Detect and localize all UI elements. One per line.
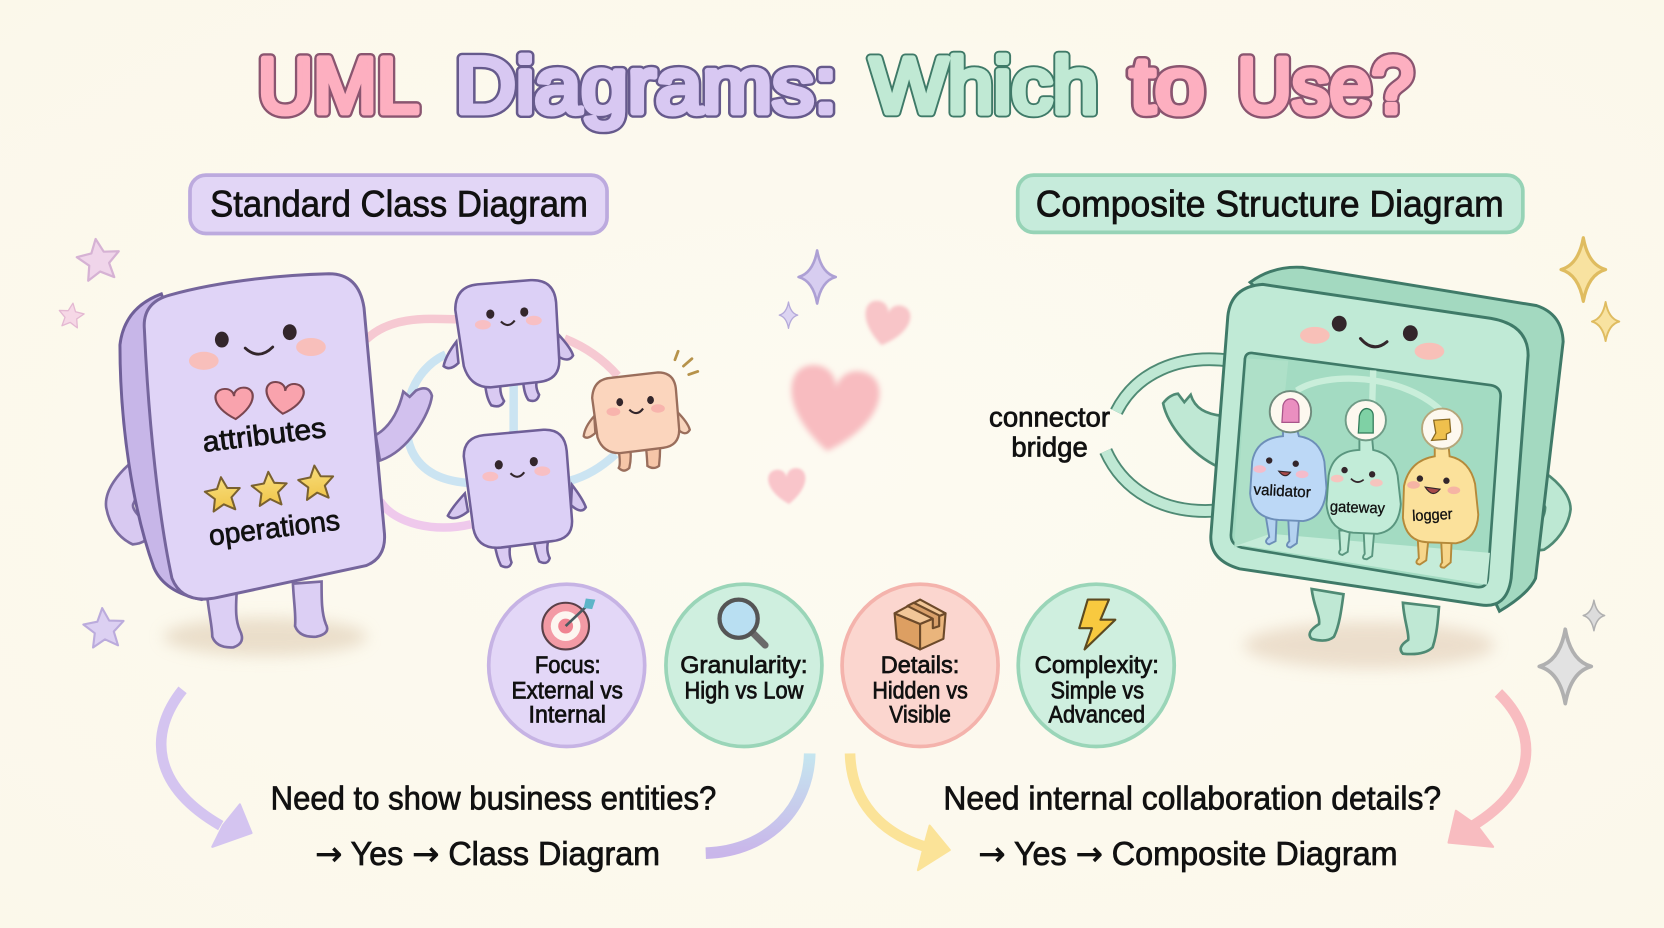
title: Diagrams:: [455, 41, 837, 129]
title: Use?: [1237, 41, 1414, 129]
text: Hidden vs: [872, 677, 968, 704]
text: [512, 652, 623, 729]
text: High vs Low: [684, 677, 804, 704]
stars: [204, 464, 335, 512]
heading: standard class diagram: [190, 175, 607, 233]
decorative sparkles and hearts centre: [767, 250, 913, 506]
arrow: blue to purple curve: [706, 753, 810, 853]
text: [1035, 652, 1159, 729]
label: logger: logger: [1412, 506, 1453, 525]
icon: magnifier: [720, 600, 765, 645]
part: validator: [1250, 391, 1327, 548]
comparison circle: granularity: [666, 584, 822, 747]
left arm: [1163, 394, 1223, 467]
icon: box: [895, 600, 946, 649]
heading: standard class diagram: Standard Class Diagram: [210, 182, 588, 224]
text: Complexity:: [1035, 652, 1159, 679]
hearts: [215, 381, 305, 420]
title: UML: [258, 41, 419, 129]
text: Simple vs: [1051, 677, 1144, 704]
shadow: [1244, 622, 1494, 669]
part: gateway: [1327, 400, 1401, 559]
character: small class top: [444, 280, 573, 406]
text: [680, 652, 808, 704]
character: peach object: [584, 351, 698, 471]
label: connector bridge: connector: [989, 402, 1110, 433]
face: [189, 324, 326, 370]
label: attributes: attributes: [201, 412, 328, 459]
text: [872, 652, 968, 729]
window: [1231, 353, 1501, 587]
decorative stars left: [57, 236, 126, 648]
text: Advanced: [1048, 702, 1145, 729]
comparison circle: complexity: [1018, 584, 1174, 747]
connector rings: left: [366, 319, 618, 527]
spark marks: [675, 351, 698, 375]
shadow: [163, 618, 367, 656]
decision text: class diagram: Need to show business entities?: [271, 780, 716, 817]
decision text: composite diagram: Need internal collaboration details?: [943, 780, 1441, 817]
heading: composite structure diagram: Composite Structure Diagram: [1036, 182, 1504, 224]
title: Use?: [1237, 41, 1414, 129]
box front: [1211, 284, 1528, 605]
title: to: [1130, 41, 1204, 129]
legs: [207, 582, 327, 647]
decision text: class diagram: [271, 780, 716, 873]
label: gateway: gateway: [1330, 498, 1386, 517]
comparison circle: details: [842, 584, 998, 747]
face: [1300, 316, 1444, 360]
decision text: class diagram: → Yes → Class Diagram: [315, 834, 660, 873]
label: connector bridge: [989, 402, 1110, 462]
title: [258, 41, 1414, 129]
arrow: pink: [1449, 693, 1526, 847]
label: operations: operations: [207, 505, 342, 552]
title: UML: [258, 41, 419, 129]
arrow: yellow: [850, 753, 950, 870]
right arm: [1526, 468, 1571, 550]
arrow: purple: [161, 690, 252, 847]
label: connector bridge: bridge: [1011, 431, 1088, 462]
label: validator: validator: [1253, 482, 1311, 502]
window floor: [1234, 534, 1490, 585]
body side: [120, 294, 228, 600]
title: to: [1130, 41, 1204, 129]
part: logger: [1403, 409, 1478, 568]
decision text: composite diagram: → Yes → Composite Diagram: [978, 834, 1398, 873]
connector bridge arcs: [1106, 359, 1231, 511]
character: standard class: [106, 274, 432, 656]
inner connector: [1297, 370, 1440, 410]
text: Granularity:: [680, 652, 808, 679]
text: Details:: [881, 652, 959, 679]
title: Diagrams:: [455, 41, 837, 129]
window left wall: [1234, 359, 1288, 548]
left arm: [106, 459, 153, 544]
title: Which: [870, 41, 1098, 129]
text: Focus:: [535, 652, 601, 679]
text: External vs: [512, 677, 623, 704]
text: Internal: [529, 702, 606, 729]
right arm: [376, 388, 432, 461]
icon: target: [542, 599, 595, 649]
decision text: composite diagram: [943, 780, 1441, 873]
icon: lightning: [1079, 600, 1115, 649]
body front: [144, 274, 385, 599]
comparison circle: focus: [489, 584, 645, 747]
legs: [1310, 589, 1439, 654]
box side: [1250, 267, 1563, 611]
character: composite structure: [1106, 267, 1571, 669]
text: Visible: [889, 702, 951, 729]
character: small class bottom: [448, 430, 586, 567]
title: Which: [870, 41, 1098, 129]
decorative sparkles right: [1539, 238, 1619, 704]
